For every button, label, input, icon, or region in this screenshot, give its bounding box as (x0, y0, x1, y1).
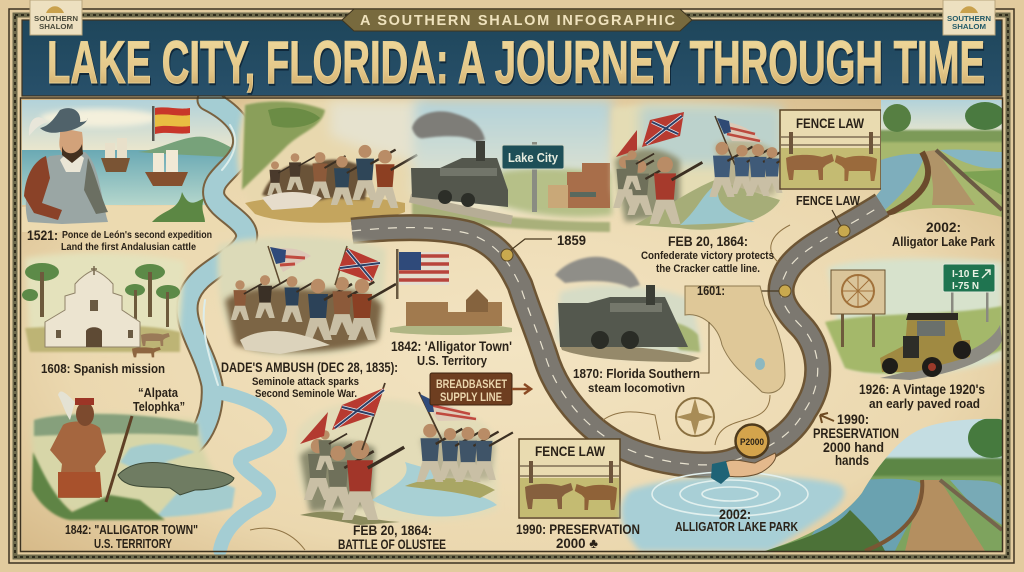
caption: Alpata Telophka: Telophka” (133, 399, 185, 414)
caption: 1926: 1926: A Vintage 1920's (859, 382, 985, 397)
icon: highway sign: I-75 N (952, 281, 979, 292)
caption: 1990 Preservation 2000: 2000 ♣ (556, 535, 598, 551)
arrow: supply line to road (512, 384, 531, 394)
caption: Dade's Ambush (221, 360, 398, 400)
caption: 2002 Alligator Lake Park, bottom: 2002: (719, 507, 751, 522)
caption: 1990 Preservation 2000 hand hands: hands (835, 453, 869, 468)
panel: Breadbasket supply line sign: BREADBASKET (436, 377, 508, 391)
caption: 1521: Ponce de León's second expedition (62, 229, 212, 241)
caption: Feb 20 1864 victory: FEB 20, 1864: (668, 233, 748, 249)
palm fronds (152, 192, 205, 222)
road: winding timeline (352, 205, 882, 465)
label: FENCE LAW (535, 443, 606, 459)
icon: vintage car (880, 313, 971, 377)
panel: Dade's ambush scene, center (218, 237, 396, 356)
ribbon: subtitle: A SOUTHERN SHALOM INFOGRAPHIC (360, 13, 676, 29)
caption: 1990 Preservation 2000 hand hands: PRESERVATION (813, 426, 899, 441)
icon: small Confederate flag (300, 412, 328, 444)
logo: left: SOUTHERN (34, 14, 78, 23)
icon: tree (965, 102, 1005, 130)
logo: left: SHALOM (39, 22, 73, 31)
caption: 1990 Preservation 2000 (516, 521, 640, 551)
caption: 1521: 1521: (27, 227, 58, 243)
icon: Native figure (50, 391, 132, 502)
caption: 1842 Alligator Town, left (65, 522, 198, 551)
caption: 2002 Alligator Lake Park, bottom (675, 507, 798, 534)
sign: Lake City: Lake City (508, 150, 559, 165)
caption: 2002 Alligator Lake Park, top: 2002: (926, 219, 961, 235)
caption: 1842 Alligator Town, center: U.S. Territory (417, 353, 488, 368)
panel: Breadbasket supply line sign (430, 373, 512, 405)
caption: 1608: 1608: Spanish mission (41, 361, 165, 376)
panel: Olustee scene, top (612, 104, 798, 230)
caption: 1601: 1601: (697, 283, 725, 298)
smoke (412, 111, 485, 142)
caption: 1521: Land the first Andalusian cattle (61, 241, 196, 253)
caption: 1926: an early paved road (869, 396, 980, 411)
icon: tree (883, 104, 911, 132)
palm trees (22, 263, 180, 327)
caption: 1926 (859, 382, 985, 411)
caption: Battle of Olustee (338, 522, 446, 552)
logo: right (943, 0, 995, 35)
logo: right: SOUTHERN (947, 14, 991, 23)
icon: tree (968, 418, 1002, 458)
boardwalk planks (922, 150, 975, 205)
icon: conquistador figure (24, 108, 108, 224)
caption: Dade's Ambush: DADE'S AMBUSH (DEC 28, 1835): (221, 360, 398, 375)
track gravel (410, 198, 512, 220)
icon: alligator (118, 462, 234, 495)
panel: Battle of Olustee scene (296, 383, 513, 525)
caption: 1990 Preservation 2000: 1990: PRESERVATION (516, 521, 640, 537)
icon: cow (525, 483, 573, 509)
caption: 1990 Preservation 2000 hand hands: 2000 hand (823, 440, 884, 455)
icon: Confederate flag (332, 383, 385, 450)
panel: Alligator Lake ripples (621, 424, 845, 551)
icon: compass rose (676, 398, 714, 436)
caption: 2002 Alligator Lake Park, top (892, 219, 996, 249)
Confederate troop (304, 430, 404, 520)
town (567, 163, 610, 208)
caption: 2002 Alligator Lake Park, top: Alligator Lake Park (892, 234, 996, 249)
panel: 1926 meadow and vintage car (825, 259, 1002, 380)
distant green hill (138, 136, 231, 157)
Union troop (709, 142, 798, 197)
panel: Florida Southern locomotive (555, 257, 702, 362)
icon: Confederate flag (335, 246, 380, 285)
panel: map area (22, 98, 1002, 551)
caption: 1870 locomotive (573, 366, 700, 395)
caption: 1990 Preservation 2000 hand hands: 1990: (837, 411, 869, 427)
icon: P2000 coin (736, 424, 768, 458)
road markers and leader lines (501, 210, 850, 423)
panel: Spanish mission scene (22, 253, 185, 357)
Union troop (417, 424, 513, 482)
river (180, 100, 280, 550)
icon: Union flag (419, 392, 478, 440)
Confederate troop (613, 150, 702, 224)
panel: Ponce de Leon coastal scene (22, 100, 247, 235)
ship, far (101, 138, 130, 172)
logo: left (30, 0, 82, 35)
caption: Feb 20 1864 victory: the Cracker cattle line. (656, 263, 760, 275)
icon: mission church (45, 266, 140, 347)
caption: 1859: 1859 (557, 232, 586, 248)
ship, near (145, 150, 188, 186)
caption: 2002 Alligator Lake Park, bottom: ALLIGATOR LAKE PARK (675, 520, 798, 534)
caption: 1842 Alligator Town, left: U.S. TERRITORY (94, 536, 172, 551)
caption: Battle of Olustee: BATTLE OF OLUSTEE (338, 536, 446, 552)
panel: locomotive and Lake City sign (410, 100, 612, 232)
logo: right: SHALOM (952, 22, 986, 31)
icon: Spanish flag (152, 106, 190, 141)
icon: highway sign: I-10 E (952, 269, 979, 280)
caption: 1870 locomotive: steam locomotivn (588, 381, 685, 395)
panel: Breadbasket supply line sign: SUPPLY LINE (440, 390, 502, 404)
panel: Florida map (676, 286, 785, 436)
leader line (700, 322, 709, 373)
train (411, 158, 508, 207)
sign: Lake City (502, 142, 564, 212)
panel: Dade's ambush scene, top (238, 99, 425, 223)
caption: Dade's Ambush: Second Seminole War. (255, 388, 357, 400)
icon: cow (835, 155, 877, 181)
caption: 1842 Alligator Town, center (391, 339, 512, 368)
icon: P2000 coin: P2000 (740, 437, 764, 447)
label: FENCE LAW (796, 115, 865, 131)
caption: Fence Law: FENCE LAW (796, 193, 861, 208)
ribbon: subtitle (342, 9, 692, 31)
caption: 1990 Preservation 2000 hand hands (813, 411, 899, 468)
caption: 1842 Alligator Town, center: 1842: 'Alligator Town' (391, 339, 512, 354)
icon: US flag over fort (396, 249, 449, 299)
icon: highway sign (943, 264, 995, 322)
decorative county lines (250, 225, 790, 550)
panel: Fence Law sign, bottom (519, 439, 620, 518)
icon: cow (786, 154, 834, 180)
fighters group (262, 160, 370, 205)
boardwalk planks (905, 480, 985, 551)
icon: cow (575, 484, 617, 510)
clouds (40, 109, 160, 127)
panel: boardwalk scene, bottom (765, 418, 1002, 551)
caption: Feb 20 1864 victory: Confederate victory protects (641, 250, 774, 262)
header banner (22, 20, 1002, 96)
panel: boardwalk scene, top (876, 100, 1002, 217)
panel: Alapata Telophka marsh and alligator scene (32, 391, 235, 520)
icon: wooden fort (390, 289, 512, 335)
caption: 1870 locomotive: 1870: Florida Southern (573, 366, 700, 381)
caption: 1842 Alligator Town, left: 1842: "ALLIGATOR TOWN" (65, 522, 198, 537)
icon: cattle (132, 333, 170, 357)
caption: 1521 (27, 227, 212, 253)
icon: compass sign (831, 270, 885, 347)
Confederate flags (616, 130, 637, 157)
panel: Fence Law sign, top (780, 110, 881, 189)
Union flag (715, 116, 762, 165)
caption: Alpata Telophka: “Alpata (138, 385, 179, 400)
icon: open hand (711, 453, 776, 484)
icon: US flag (268, 246, 311, 283)
caption: Battle of Olustee: FEB 20, 1864: (353, 522, 432, 538)
caption: Dade's Ambush: Seminole attack sparks (252, 376, 359, 388)
caption: Alpata Telophka (133, 385, 185, 414)
caption: Feb 20 1864 victory (641, 233, 774, 275)
